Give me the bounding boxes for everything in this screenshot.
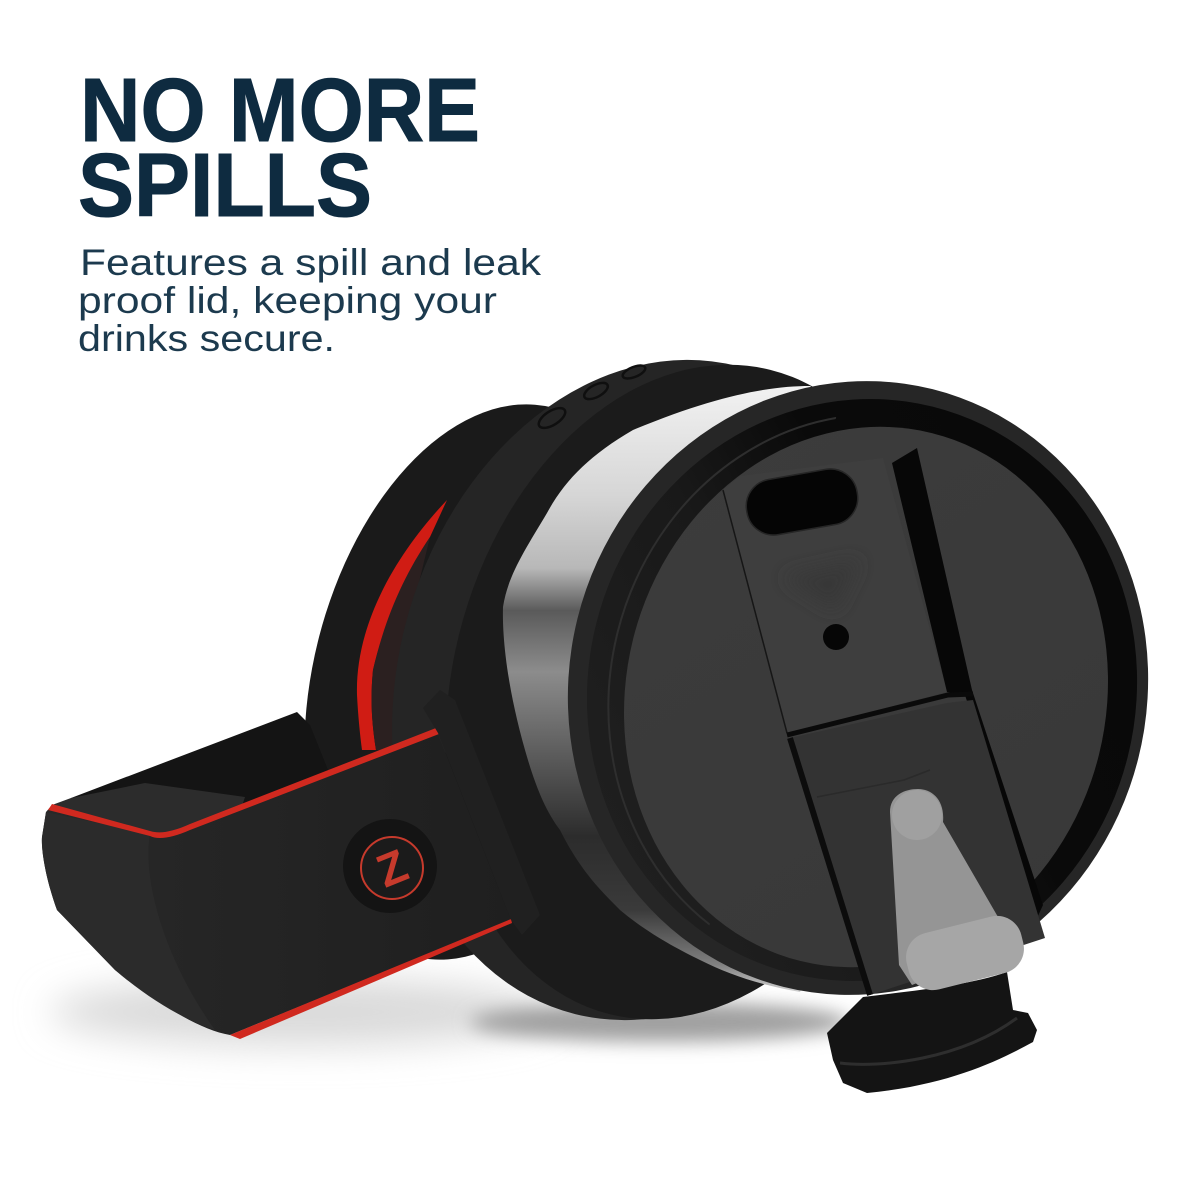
lid plate	[567, 375, 1165, 1019]
back base disc	[250, 366, 716, 998]
recess beside red ring	[372, 537, 430, 750]
steel body	[503, 386, 900, 992]
infographic canvas	[42, 78, 1148, 1093]
description text: drinks secure.	[78, 318, 335, 359]
embossed band lettering	[536, 363, 647, 432]
handle clip	[423, 690, 540, 935]
recess left edge	[723, 490, 787, 733]
logo badge	[343, 819, 437, 913]
handle side facet	[42, 812, 215, 1030]
oval vent hole	[742, 465, 862, 539]
handle lower red trim	[230, 919, 512, 1039]
title: NO MORE	[80, 61, 480, 161]
lid pull tab	[827, 972, 1037, 1093]
lid inner wall	[525, 340, 1199, 1040]
red ring	[357, 500, 447, 750]
handle	[42, 690, 540, 1039]
lid outer rim	[503, 319, 1200, 1057]
silicone band	[324, 303, 988, 1077]
small drain hole	[823, 624, 849, 650]
handle inner recess	[71, 712, 365, 836]
description text: Features a spill and leak	[80, 242, 542, 283]
description text	[78, 242, 542, 359]
handle top surface	[52, 783, 245, 836]
slider top notch line	[787, 694, 973, 735]
grey slider lever	[890, 789, 1029, 995]
handle outer face	[42, 729, 511, 1035]
handle red trim	[48, 728, 439, 838]
slider seam	[817, 770, 930, 797]
silicone band main face	[379, 312, 1001, 1072]
title: SPILLS	[78, 136, 372, 236]
description text: proof lid, keeping your	[78, 280, 497, 321]
slider plate	[790, 700, 1045, 995]
title	[78, 61, 480, 236]
vent recess panel	[723, 458, 947, 733]
funnel groove	[783, 560, 860, 610]
slider channel	[892, 448, 1043, 918]
slider left groove	[790, 738, 870, 995]
lid ridge	[608, 417, 836, 926]
ground shadow	[50, 978, 850, 1046]
mug illustration	[42, 360, 1148, 1093]
logo badge: Z	[369, 839, 415, 897]
